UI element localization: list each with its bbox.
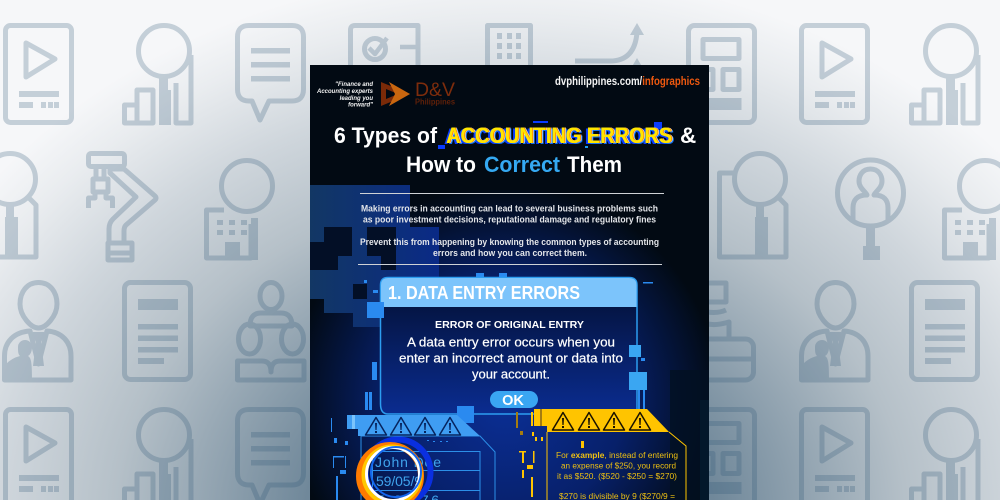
title: Them: [567, 152, 622, 177]
intro text: [360, 202, 659, 258]
warning icons: [552, 412, 650, 430]
yellow warning panel: [516, 409, 686, 500]
logo wordmark: Philippines: [415, 98, 456, 106]
infographic poster: [290, 65, 720, 500]
intro text: Prevent this from happening by knowing the common types of accounting: [360, 236, 659, 247]
warning icons: [366, 418, 460, 435]
title highlight: accounting errors: ACCOUNTING ERRORS: [446, 123, 672, 148]
magnifier rings: [359, 440, 430, 500]
glitch marks: [331, 273, 653, 500]
record form: 59/05/9: [376, 473, 422, 489]
example text: For example, instead of entering: [556, 450, 678, 460]
dialog body text: your account.: [472, 368, 550, 382]
title: [334, 121, 696, 177]
connector squares: [367, 302, 647, 423]
intro text: errors and how you can correct them.: [433, 247, 587, 258]
dialog body text: enter an incorrect amount or data into: [399, 352, 623, 366]
example text: [556, 450, 678, 500]
record form: John Doe: [375, 454, 441, 470]
dialog box: data entry errors: [367, 278, 647, 423]
yellow glitch marks: [516, 412, 584, 497]
dialog body text: A data entry error occurs when you: [407, 336, 615, 350]
title: &: [680, 123, 696, 148]
intro text: as poor investment decisions, reputational damage and regulatory fines: [363, 214, 656, 224]
poster background: [310, 65, 709, 500]
title: 6 Types of: [334, 123, 437, 148]
blue warning panel: [347, 415, 495, 500]
OK button: [490, 391, 538, 409]
example text: an expense of $250, you record: [561, 460, 676, 470]
title: Correct: [484, 152, 560, 177]
tagline: Accounting experts: [316, 89, 374, 95]
website url: dvphilippines.com/infographics: [555, 76, 700, 88]
tagline: forward": [348, 102, 373, 108]
title: How to: [406, 152, 476, 177]
record form: [372, 452, 480, 500]
tagline: [316, 82, 374, 108]
icon: D&V logo mark: [381, 82, 410, 106]
dialog heading: 1. DATA ENTRY ERRORS: [388, 282, 580, 303]
dialog body text: [399, 336, 623, 382]
logo wordmark: [416, 82, 455, 106]
dialog subheading: ERROR OF ORIGINAL ENTRY: [435, 319, 584, 331]
tagline: leading you: [340, 96, 373, 102]
intro text: Making errors in accounting can lead to several business problems such: [361, 202, 658, 214]
logo wordmark: D&V: [415, 80, 455, 101]
tagline: "Finance and: [335, 82, 373, 88]
OK button: OK: [502, 393, 524, 409]
example text: it as $520. ($520 - $250 = $270): [557, 471, 677, 481]
dialog header: [381, 278, 636, 307]
